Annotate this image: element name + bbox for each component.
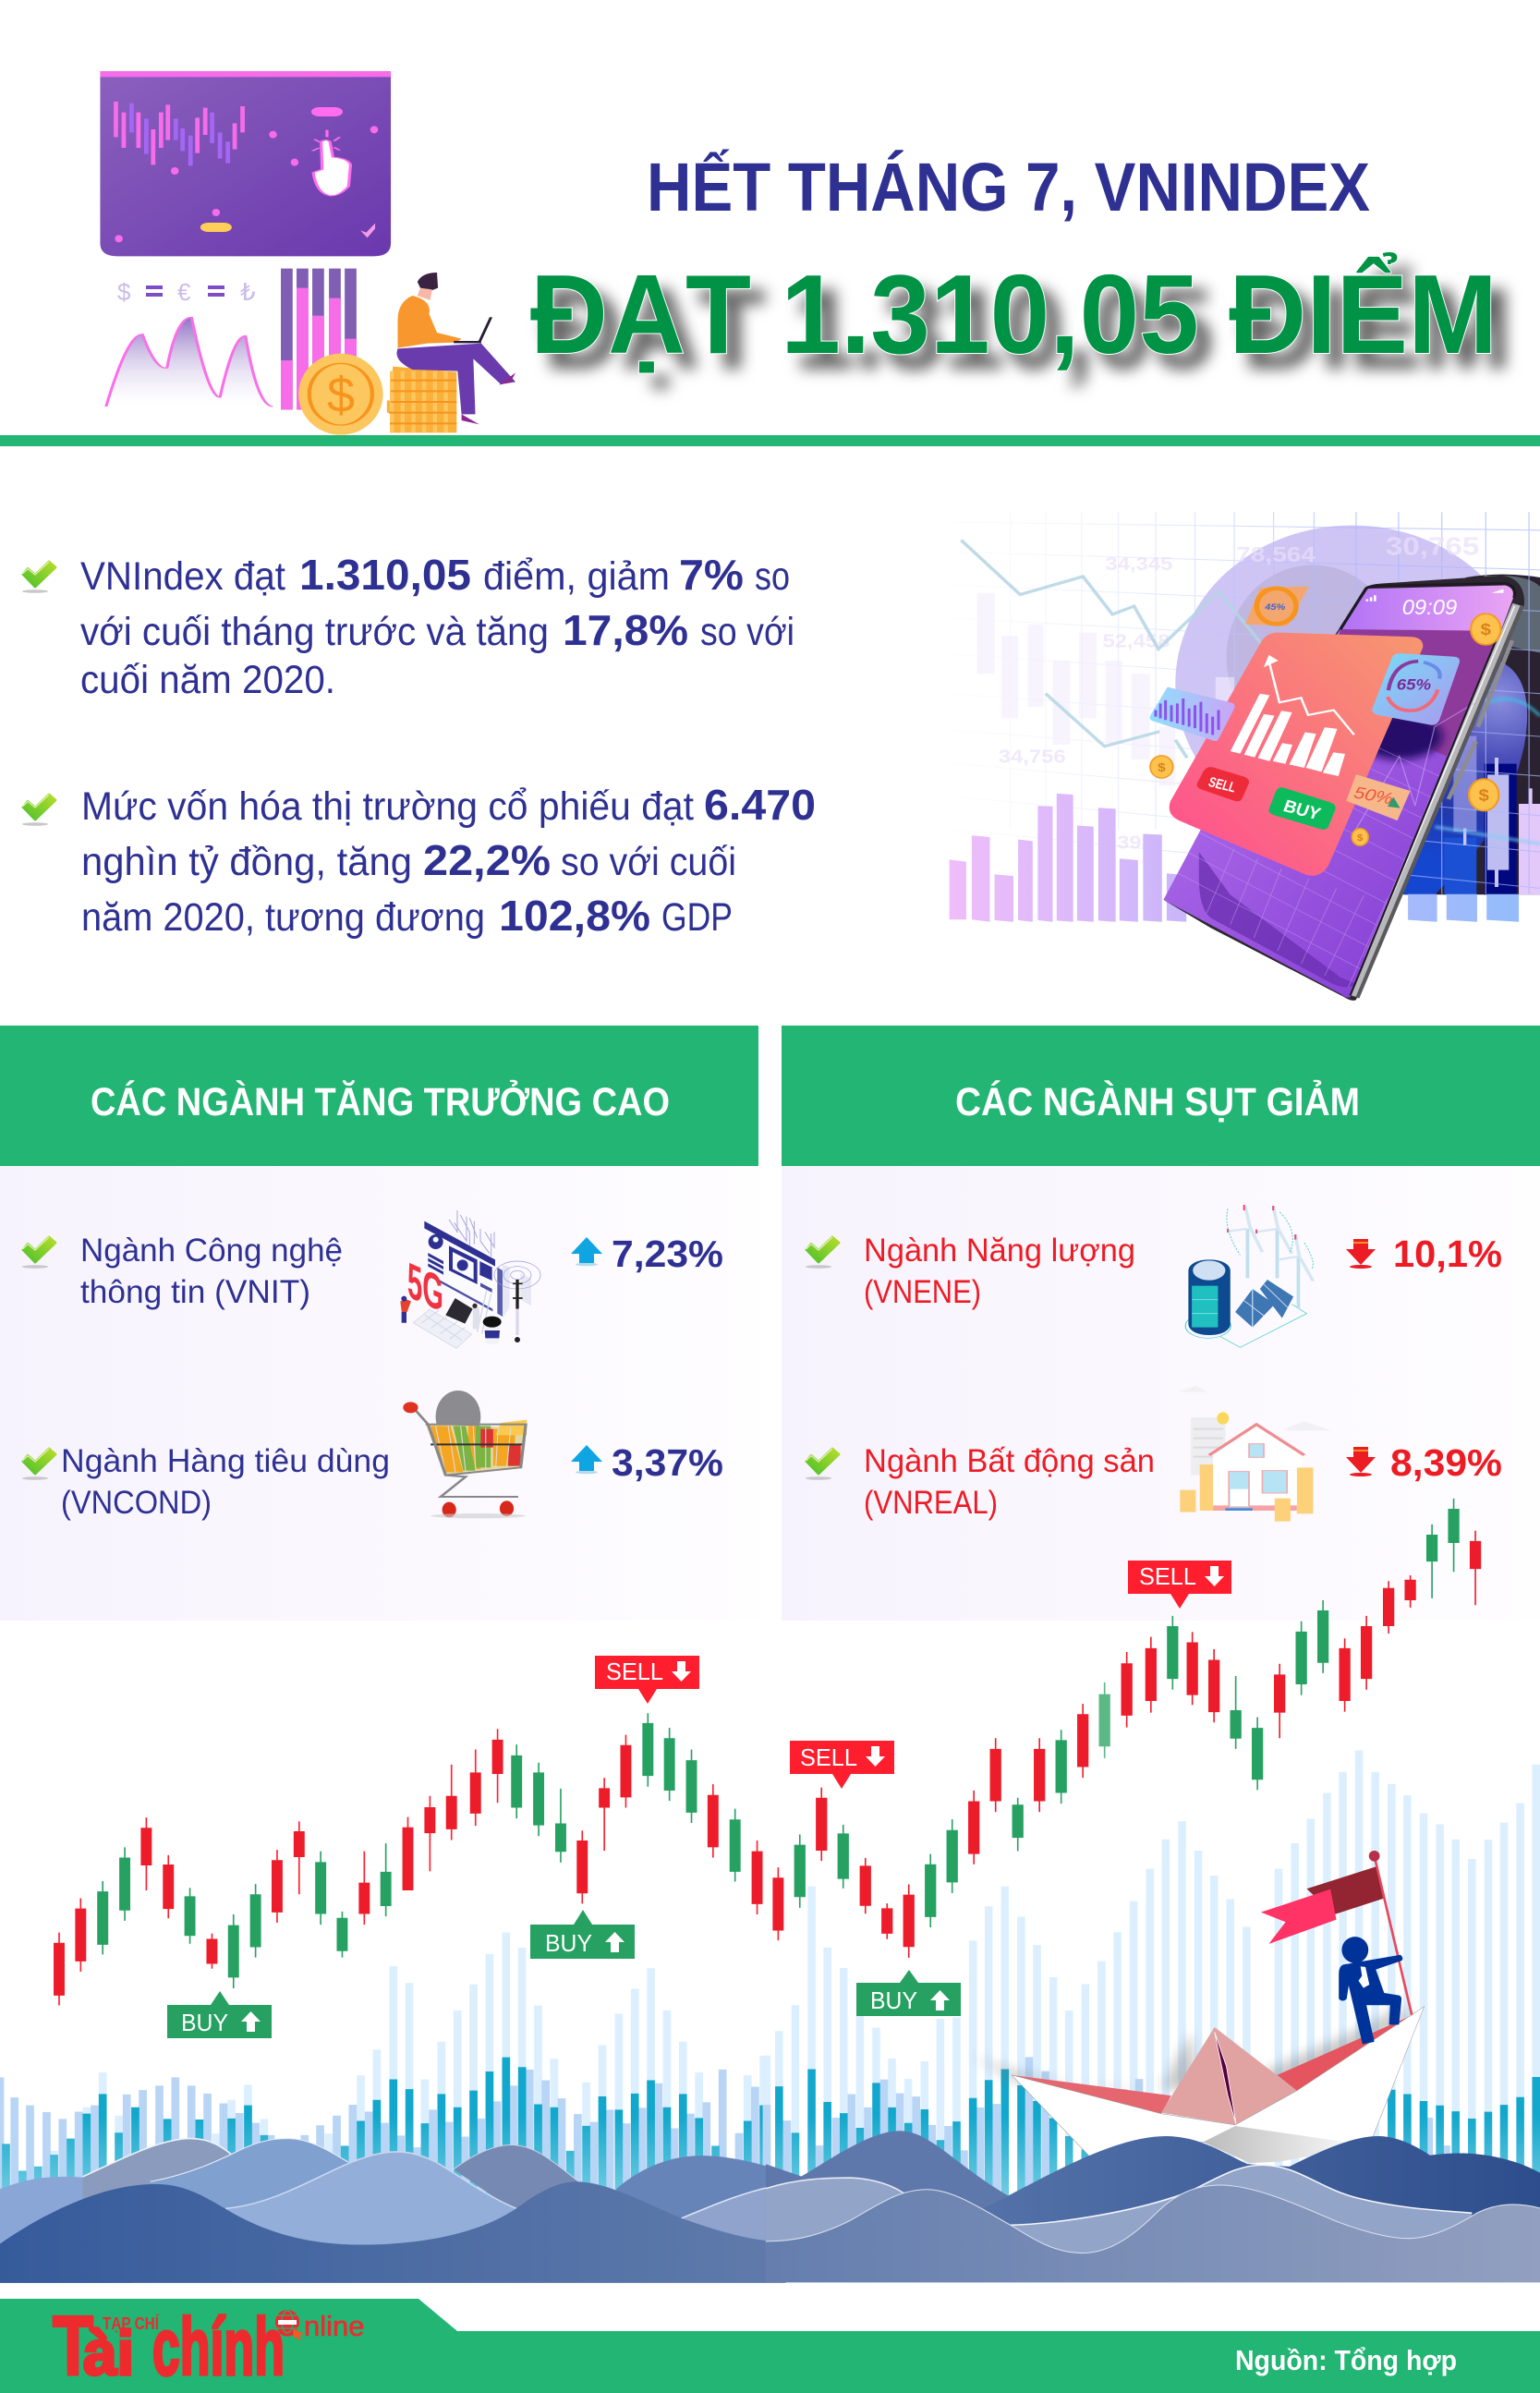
buy marker 3: BUY (870, 1986, 917, 2014)
online wordmark: Online (276, 2310, 364, 2342)
icon: 5G monitor: 5G (407, 1251, 443, 1323)
text block: market cap: năm 2020, tương đương (81, 895, 485, 940)
app card (1170, 633, 1423, 876)
footer band (0, 2299, 1540, 2393)
item: energy (805, 1205, 1502, 1347)
panel heading (782, 1026, 1540, 1166)
light wave left (766, 2178, 907, 2253)
icon: down arrow (1346, 1447, 1376, 1476)
panel background (782, 1166, 1540, 1621)
text block: market cap: 22,2% (423, 836, 551, 884)
sell button (1197, 767, 1249, 801)
coin dollar sign: $ (327, 368, 355, 423)
item: technology (21, 1210, 723, 1348)
sell button: SELL (1207, 774, 1238, 796)
inner shaded circle (1227, 565, 1400, 749)
icon: up arrow (571, 1445, 602, 1474)
buy marker 2 (530, 1910, 635, 1959)
item: consumer goods (21, 1391, 723, 1521)
sector label: Ngành Công nghệ (80, 1233, 343, 1269)
pale candlesticks (976, 593, 1234, 786)
buy marker 3 (856, 1970, 961, 2016)
source note: Nguồn: Tổng hợp (1235, 2344, 1457, 2376)
pale figures: 4,398 (1098, 832, 1154, 853)
sector label: (VNREAL) (864, 1485, 998, 1521)
buy button: BUY (1280, 797, 1323, 824)
icon: check mark (21, 793, 56, 826)
text block: market cap: nghìn tỷ đồng, tăng (81, 840, 412, 884)
sector label: Ngành Bất động sản (864, 1443, 1155, 1479)
dark panel and candles behind phone (1374, 575, 1540, 894)
waves: left half (0, 2139, 785, 2283)
waves and paper boat: right half (766, 1851, 1540, 2282)
icon: check mark (21, 1236, 56, 1269)
text block: market cap: GDP (661, 895, 733, 940)
50% card: 50% (1352, 783, 1395, 808)
text block: VNIndex: 17,8% (563, 606, 688, 654)
pale figures (999, 532, 1479, 853)
pale figures: 30,765 (1386, 532, 1479, 561)
phone bezel (1351, 598, 1513, 995)
icon: battery, solar panels and wind turbines (1185, 1205, 1313, 1347)
candlestick chart: left half (59, 1713, 778, 2006)
dark shade under gauge card (1374, 718, 1449, 765)
navy waves (984, 2136, 1540, 2262)
logo wordmark: T (53, 2300, 93, 2393)
icon: 5G monitor (400, 1210, 540, 1348)
bullet: VNIndex summary (21, 551, 794, 702)
gradient bar chart (950, 794, 1519, 922)
icon: shopping cart (403, 1391, 527, 1518)
mid wave crest (1009, 2165, 1472, 2262)
front wave (766, 2185, 1540, 2282)
value: 10,1% (1393, 1233, 1502, 1275)
bars mini card (1150, 687, 1235, 741)
phone screen (1163, 629, 1500, 998)
sector label: thông tin (VNIT) (80, 1274, 310, 1310)
panel heading: CÁC NGÀNH SỤT GIẢM (955, 1079, 1360, 1124)
pale figures: 52,458 (1103, 631, 1170, 651)
logo: Tạp chí Tài chính Online (53, 2300, 364, 2393)
title line 1: HẾT THÁNG 7, VNINDEX (647, 149, 1370, 225)
logo wordmark: chính (139, 2302, 285, 2392)
phone top bar (1340, 583, 1515, 631)
screen grid (1178, 748, 1439, 987)
value: 8,39% (1390, 1441, 1502, 1484)
sector label (80, 1233, 343, 1310)
currency symbols row: ₺ (240, 278, 256, 306)
sector label: Ngành Hàng tiêu dùng (61, 1443, 390, 1479)
screen dark corner shade (1199, 852, 1356, 988)
volume bar chart: left half (0, 1933, 768, 2238)
dark magenta upper screen (1325, 629, 1500, 757)
text block: VNIndex: VNIndex đạt (80, 554, 285, 599)
icon: globe (275, 2310, 304, 2340)
flag on pole (1261, 1851, 1412, 2015)
sector label: (VNENE) (864, 1274, 981, 1310)
text block: market cap: 6.470 (704, 781, 816, 829)
icon: down arrow (1346, 1239, 1376, 1269)
icon: check mark (805, 1236, 841, 1269)
currency symbols row (117, 278, 256, 306)
item: real estate (805, 1386, 1502, 1522)
value: 3,37% (612, 1441, 723, 1484)
panel heading: CÁC NGÀNH TĂNG TRƯỞNG CAO (91, 1079, 670, 1124)
icon: house with coins (1179, 1386, 1331, 1522)
45% gauge card: 45% (1264, 603, 1285, 613)
sector label: Ngành Năng lượng (864, 1233, 1135, 1269)
sell marker 3 (1128, 1561, 1231, 1609)
text block: VNIndex: 7% (679, 551, 744, 599)
pale figures: 78,564 (1236, 543, 1316, 566)
back wave (766, 2131, 1009, 2262)
sector label (864, 1233, 1135, 1310)
value: 7,23% (612, 1233, 723, 1275)
sell marker 2: SELL (800, 1743, 857, 1771)
background grid (948, 512, 1540, 894)
buy button (1268, 787, 1336, 830)
coin stack (387, 367, 456, 432)
buy marker 1 (167, 1991, 272, 2038)
buy marker 1: BUY (181, 2009, 228, 2036)
panel: declining sectors (782, 1026, 1540, 1621)
header divider bar (0, 435, 1540, 446)
text block: VNIndex (80, 551, 794, 702)
panel: high-growth sectors (0, 1026, 758, 1621)
background lilac circle (1175, 526, 1529, 842)
text block: market cap: 102,8% (499, 892, 650, 940)
sell marker 3: SELL (1139, 1562, 1196, 1590)
text block: VNIndex: với cuối tháng trước và tăng (80, 610, 549, 654)
candlestick chart: right half (800, 1499, 1475, 1958)
text block: market cap: Mức vốn hóa thị trường cổ phiếu đạt (81, 784, 694, 829)
phone top bar: 09:09 (1402, 596, 1457, 619)
person with laptop (396, 273, 515, 424)
purple dashboard panel (100, 71, 391, 256)
currency symbols row: € (177, 278, 191, 306)
sell marker 1: SELL (606, 1658, 663, 1685)
gold coins (1150, 613, 1500, 845)
currency symbols row: $ (117, 278, 131, 306)
65% gauge card (1372, 653, 1460, 725)
gold coins: $ (1158, 760, 1166, 774)
sector label (864, 1443, 1155, 1521)
area line chart (106, 317, 273, 407)
gold coins: $ (1357, 833, 1364, 844)
icon: check mark (21, 1447, 56, 1480)
title line 2: ĐẠT 1.310,05 ĐIỂM (530, 251, 1498, 377)
sector label: (VNCOND) (61, 1485, 212, 1521)
logo overline: TẠP CHÍ (103, 2314, 160, 2333)
declining line chart (961, 541, 1262, 758)
paper boat (969, 2007, 1425, 2163)
sell marker 2 (790, 1741, 894, 1789)
sector label (61, 1443, 390, 1521)
climbing figure (1339, 1937, 1402, 2045)
phone body (1163, 576, 1524, 1001)
card bar chart (1231, 694, 1345, 776)
panel heading (0, 1026, 758, 1166)
65% gauge card: 65% (1397, 676, 1431, 693)
45% gauge card (1245, 587, 1309, 626)
header illustration: purple dashboard, charts, person on coins (100, 71, 515, 435)
panel background (0, 1166, 758, 1621)
gold coins: $ (1481, 621, 1492, 638)
icon: check mark (805, 1447, 841, 1480)
text block: market cap (81, 781, 816, 940)
illustration: smartphone with trading app (948, 512, 1540, 1001)
text block: VNIndex: so (755, 554, 790, 599)
buy marker 2: BUY (545, 1929, 592, 1957)
screen zig-zag chart (1356, 703, 1474, 829)
gold coins: $ (1479, 786, 1489, 804)
text block: VNIndex: cuối năm 2020. (80, 658, 335, 702)
rising arrow (1264, 655, 1354, 735)
sell marker 1 (595, 1656, 699, 1704)
volume bar chart: right half (763, 1750, 1540, 2238)
pale figures: 34,345 (1106, 553, 1172, 574)
text block: VNIndex: 1.310,05 (299, 551, 471, 599)
gold coin (298, 354, 383, 435)
logo wordmark: ài (83, 2318, 134, 2388)
pale figures: 34,756 (999, 746, 1066, 767)
text block: VNIndex: so với (700, 610, 794, 654)
50% card (1346, 774, 1411, 820)
vertical bars (281, 269, 357, 409)
icon: check mark (21, 560, 56, 593)
text block: VNIndex: điểm, giảm (483, 554, 670, 599)
icon: up arrow (571, 1237, 602, 1266)
text block: market cap: so với cuối (561, 840, 736, 884)
bullet: market capitalisation (21, 781, 816, 940)
